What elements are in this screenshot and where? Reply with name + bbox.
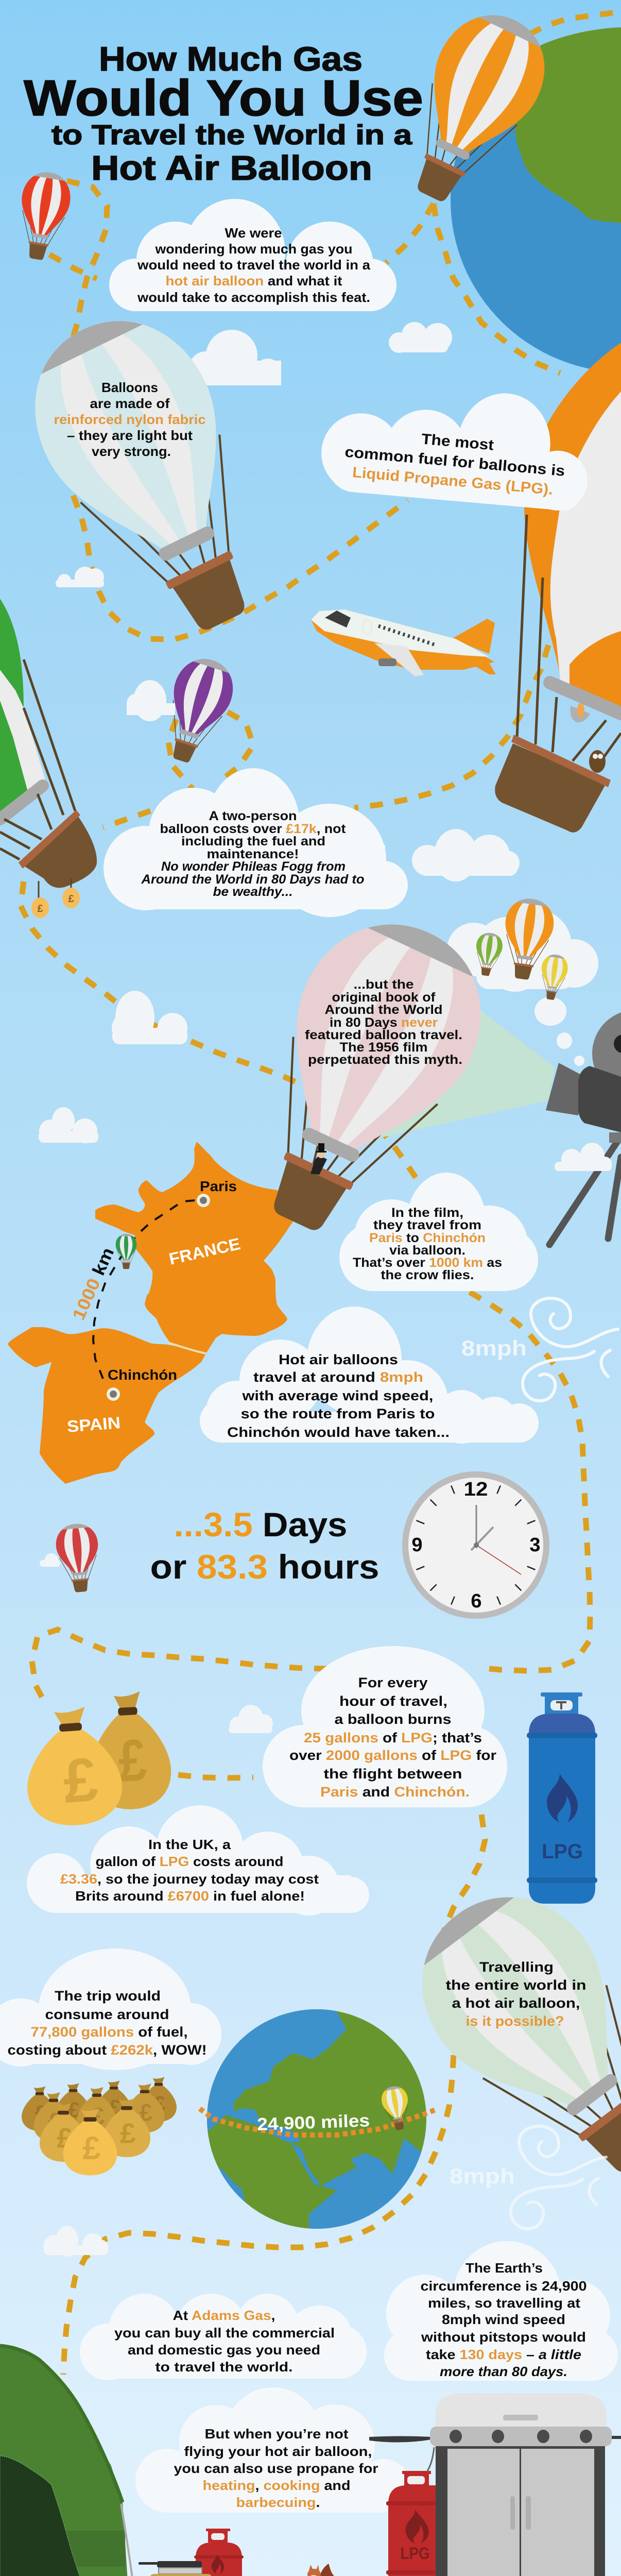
intro cloud shape	[109, 199, 396, 311]
speed cloud shape	[200, 1307, 539, 1444]
small red LPG cylinder	[194, 2529, 244, 2576]
cost text: Around the World in 80 Days had to	[141, 872, 365, 887]
cost text: No wonder Phileas Fogg from	[161, 859, 346, 874]
LPG text: common fuel for balloons is	[344, 444, 565, 480]
cost text: be wealthy...	[213, 885, 292, 899]
label: miles: 24,900 miles	[257, 2111, 370, 2134]
intro text: hot air balloon and what it	[166, 273, 342, 289]
panel: pink balloon, book myth	[208, 890, 517, 1262]
possible text: a hot air balloon,	[452, 1995, 580, 2011]
clock: 12	[463, 1479, 488, 1500]
uses cloud shape	[135, 2387, 410, 2513]
panel: speed cloud	[200, 1307, 539, 1444]
icon: squirrel	[307, 2564, 335, 2576]
UK cloud shape	[27, 1805, 369, 1916]
clock: 3	[529, 1534, 541, 1556]
duration headline	[150, 1505, 379, 1586]
balloon: green left with money bags: £	[68, 893, 74, 905]
pin: Paris	[197, 1194, 210, 1207]
label: France: FRANCE	[167, 1234, 242, 1268]
panel: burn-rate cloud	[263, 1646, 507, 1807]
LPG blue cylinder: LPG	[542, 1840, 583, 1863]
LPG text: The most	[421, 431, 495, 454]
money bag group: £	[48, 2108, 61, 2135]
cost text: including the fuel and	[181, 834, 325, 849]
burn cloud shape	[263, 1646, 507, 1807]
nylon text	[54, 380, 206, 459]
money bag group: £	[91, 2103, 105, 2130]
possible text: is it possible?	[465, 2013, 564, 2029]
circumference text: circumference is 24,900	[420, 2278, 587, 2294]
panel: trip total cloud	[0, 1948, 221, 2070]
money bag group: £	[153, 2091, 166, 2115]
large red LPG cylinder: LPG	[401, 2544, 429, 2563]
large red LPG cylinder	[386, 2447, 436, 2576]
cloud right of cost panel	[412, 829, 520, 882]
circumference text: take 130 days – a little	[426, 2347, 581, 2362]
label: Paris: Paris	[200, 1178, 237, 1194]
cost cloud shape	[104, 768, 408, 917]
intro text: wondering how much gas you	[154, 241, 352, 257]
intro text: We were	[225, 225, 282, 241]
barbecue grill	[369, 2393, 621, 2576]
burn text: For every	[358, 1675, 427, 1690]
balloon: small red	[11, 167, 76, 263]
UK text: £3.36 , so the journey today may cost	[60, 1871, 319, 1887]
cloud left of map	[112, 991, 187, 1044]
globe: top right	[451, 27, 621, 372]
nylon text: – they are light but	[67, 428, 193, 443]
bag front: £	[61, 1745, 100, 1816]
bag front	[22, 1705, 125, 1828]
balloon: pink	[208, 890, 517, 1262]
UK text: In the UK, a	[148, 1837, 231, 1852]
Adams text: At Adams Gas ,	[173, 2308, 275, 2323]
uses text: heating , cooking and	[203, 2478, 350, 2493]
balloon: pale green	[381, 1857, 621, 2216]
bag back: £	[117, 1726, 148, 1794]
balloon: muted red	[53, 1521, 104, 1594]
nylon text: very strong.	[92, 444, 171, 459]
money bag group: £	[68, 2097, 80, 2122]
cost text: maintenance!	[207, 847, 299, 861]
film text: the crow flies.	[381, 1268, 474, 1282]
panel: UK price cloud	[27, 1805, 369, 1916]
panel: film route cloud	[339, 1173, 538, 1291]
balloon: green left with money bags	[0, 599, 97, 918]
Adams text: and domestic gas you need	[128, 2342, 320, 2358]
map: Spain	[8, 1327, 206, 1484]
label: Spain: SPAIN	[66, 1413, 121, 1436]
clock: 6	[471, 1590, 482, 1612]
panel: two-person balloon cost cloud	[104, 768, 408, 917]
money bags pair	[22, 1690, 173, 1828]
nylon text: reinforced nylon fabric	[54, 412, 206, 427]
label: 1000 km: 1000 km	[69, 1245, 118, 1323]
uses text: barbecuing .	[236, 2495, 320, 2510]
speed text: so the route from Paris to	[241, 1406, 435, 1421]
small cloud left	[56, 567, 104, 587]
icon: owl	[589, 750, 606, 773]
background cloud behind pale balloon	[189, 330, 281, 385]
cost text: balloon costs over £17k, not	[160, 822, 346, 836]
cost text	[141, 809, 365, 899]
small cloud	[229, 1705, 273, 1733]
trip text: consume around	[45, 2007, 169, 2022]
circumference text: 8mph wind speed	[442, 2312, 565, 2327]
film text: Paris to Chinchón	[369, 1231, 486, 1245]
speed text: Chinchón would have taken...	[227, 1425, 450, 1440]
myth text: ...but the	[353, 977, 414, 992]
burn text: 25 gallons of LPG; that’s	[304, 1730, 482, 1745]
balloon: large orange right	[495, 343, 621, 833]
money bag group: £	[34, 2100, 47, 2125]
duration headline: ...3.5 Days	[174, 1505, 347, 1544]
title: Would You Use	[24, 70, 423, 126]
Adams cloud shape	[80, 2294, 367, 2380]
clock: 9	[411, 1534, 423, 1556]
Adams text: you can buy all the commercial	[114, 2325, 335, 2341]
balloon: yellow on globe	[378, 2084, 413, 2132]
UK text	[60, 1837, 319, 1904]
airplane	[311, 609, 496, 676]
burn text: over 2000 gallons of LPG for	[289, 1748, 497, 1763]
LPG text: Liquid Propane Gas (LPG).	[352, 464, 554, 498]
balloon: purple	[151, 650, 243, 770]
cloud near camera	[555, 1143, 612, 1171]
balloon: thought orange	[496, 895, 558, 982]
title: How Much Gas	[99, 40, 363, 78]
burn text: hour of travel,	[339, 1693, 447, 1709]
balloon: pale nylon	[0, 286, 308, 663]
clock	[405, 1475, 546, 1616]
money bag group	[22, 2077, 177, 2175]
trip text: The trip would	[55, 1988, 161, 2004]
small cloud	[389, 322, 452, 353]
burn text: Paris and Chinchón.	[320, 1784, 470, 1800]
balloon: thought green	[472, 931, 505, 977]
intro text: would take to accomplish this feat.	[137, 290, 370, 305]
intro text: would need to travel the world in a	[137, 257, 371, 273]
circumference text	[420, 2260, 587, 2379]
balloon: route green	[115, 1233, 137, 1269]
burn text	[289, 1675, 497, 1800]
money bag group: £	[120, 2117, 136, 2149]
trip text: costing about £262k, WOW!	[7, 2042, 207, 2058]
circumference text: more than 80 days.	[440, 2364, 567, 2379]
grounded dark green balloon	[0, 2346, 135, 2576]
wind speed label upper: 8mph	[461, 1336, 527, 1360]
panel: intro cloud	[109, 199, 396, 311]
map: France	[95, 1142, 301, 1353]
label: Chinchón: Chinchón	[108, 1367, 177, 1383]
Pyrenees border line	[168, 1343, 206, 1353]
map labels and route	[66, 1178, 242, 1436]
circumference text: The Earth’s	[465, 2260, 543, 2276]
speed text: travel at around 8mph	[253, 1369, 423, 1385]
panel: is it possible balloon	[381, 1857, 621, 2216]
title	[24, 40, 423, 188]
title: Hot Air Balloon	[91, 149, 372, 188]
UK text: Brits around £6700 in fuel alone!	[75, 1888, 305, 1904]
myth text: Around the World	[324, 1003, 443, 1017]
bag back	[87, 1690, 173, 1811]
panel: circumference cloud	[384, 2241, 618, 2381]
cloud behind purple balloon	[127, 680, 175, 721]
film text: In the film,	[391, 1206, 463, 1220]
wind swirl lower	[511, 2126, 606, 2229]
black dashed route	[93, 1200, 195, 1379]
LPG text	[342, 425, 567, 499]
thought bubble with balloons	[447, 895, 598, 1066]
UK text: gallon of LPG costs around	[96, 1854, 283, 1869]
burn text: the flight between	[323, 1766, 462, 1782]
circumference text: miles, so travelling at	[428, 2295, 580, 2311]
film text: via balloon.	[389, 1243, 465, 1258]
Adams text	[114, 2308, 335, 2375]
film camera with tripod	[546, 1010, 621, 1245]
myth text: original book of	[332, 990, 436, 1005]
circumference cloud shape	[384, 2241, 618, 2381]
panel: other propane uses cloud	[135, 2387, 410, 2513]
myth text: in 80 Days never	[330, 1015, 438, 1030]
globe with 24,900 miles route	[200, 2004, 438, 2236]
nylon text: Balloons	[101, 380, 158, 395]
myth text: featured balloon travel.	[305, 1028, 462, 1042]
route around globe	[200, 2109, 438, 2135]
uses text: But when you’re not	[205, 2426, 349, 2442]
wind swirl upper	[523, 1298, 618, 1401]
nylon text: are made of	[90, 396, 170, 411]
duration headline: or 83.3 hours	[150, 1548, 379, 1586]
intro text	[137, 225, 371, 305]
speed text: with average wind speed,	[242, 1388, 434, 1403]
balloon: orange top right	[379, 0, 567, 221]
pin: Chinchón	[107, 1387, 120, 1401]
uses text: flying your hot air balloon,	[184, 2444, 372, 2459]
LPG blue cylinder	[527, 1692, 597, 1904]
panel: pale balloon with nylon fact	[0, 286, 308, 663]
balloon: green left with money bags: £	[37, 903, 43, 914]
uses text: you can also use propane for	[174, 2461, 378, 2476]
cost text: A two-person	[209, 809, 297, 823]
wind speed label lower: 8mph	[450, 2164, 515, 2188]
uses text	[174, 2426, 378, 2510]
burn text: a balloon burns	[335, 1711, 451, 1727]
film text	[353, 1206, 502, 1282]
cloud small behind red balloon	[40, 1553, 60, 1567]
money bag group: £	[57, 2122, 73, 2154]
trip cloud shape	[0, 1948, 221, 2070]
possible text	[446, 1959, 586, 2029]
speed text: Hot air balloons	[279, 1352, 398, 1367]
trip text: 77,800 gallons of fuel,	[31, 2024, 187, 2040]
Adams text: to travel the world.	[156, 2359, 292, 2375]
small cloud left	[39, 1107, 98, 1143]
circumference text: without pitstops would	[421, 2329, 586, 2345]
small cloud	[44, 2226, 108, 2257]
possible text: Travelling	[479, 1959, 554, 1975]
possible text: the entire world in	[446, 1977, 586, 1993]
myth text: The 1956 film	[340, 1040, 427, 1055]
camping stove with pan	[139, 2561, 212, 2576]
myth text	[305, 977, 462, 1067]
panel: LPG cloud	[318, 378, 595, 513]
LPG cloud shape	[318, 378, 595, 513]
myth text: perpetuated this myth.	[308, 1053, 462, 1067]
money bag group: £	[109, 2095, 121, 2119]
title: to Travel the World in a	[51, 120, 412, 150]
film text: That’s over 1000 km as	[353, 1256, 502, 1270]
cinema projector beam	[353, 1006, 555, 1144]
film text: they travel from	[373, 1218, 481, 1232]
trip text	[7, 1988, 207, 2058]
money bag group: £	[82, 2130, 100, 2166]
film cloud shape	[339, 1173, 538, 1291]
balloon: thought yellow	[537, 952, 571, 1002]
money bag group: £	[139, 2099, 152, 2126]
speed text	[227, 1352, 450, 1440]
icon: gentleman with top hat	[310, 1143, 327, 1175]
panel: Adams Gas cloud	[80, 2294, 367, 2380]
